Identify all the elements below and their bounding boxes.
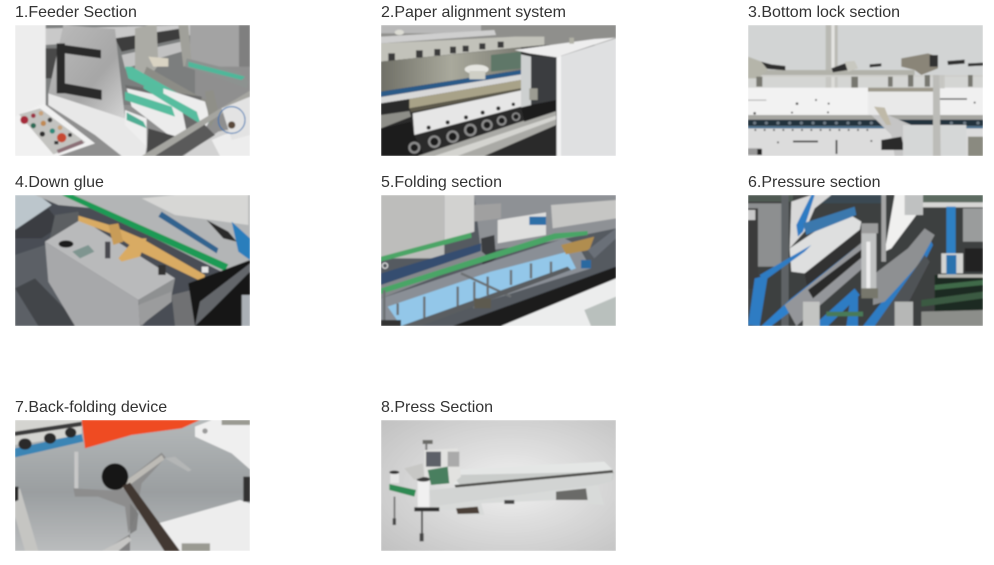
heading: Press Section: 8.Press Section: [381, 399, 493, 416]
panel: 1 Feeder Section: [15, 4, 250, 156]
photo: press section machine: [381, 420, 616, 551]
photo: feeder section: [15, 25, 250, 156]
heading: Back-folding device: 7.Back-folding device: [15, 399, 167, 416]
photo: pressure section: [748, 195, 983, 326]
heading: Paper alignment system: 2.Paper alignment system: [381, 4, 566, 21]
panel: 3 Bottom lock section: [748, 4, 983, 156]
heading: Bottom lock section: 3.Bottom lock section: [748, 4, 900, 21]
photo: paper alignment: [381, 25, 616, 156]
photo: back-folding device: [15, 420, 250, 551]
heading: Folding section: 5.Folding section: [381, 174, 502, 191]
photo: down glue: [15, 195, 250, 326]
photo: folding section: [381, 195, 616, 326]
panel: 7 Back-folding device: [15, 399, 250, 551]
panel: 5 Folding section: [381, 174, 616, 326]
photo: bottom lock: [748, 25, 983, 156]
panel: 2 Paper alignment system: [381, 4, 616, 156]
panel: 4 Down glue: [15, 174, 250, 326]
panel: 8 Press Section: [381, 399, 616, 551]
panel: 6 Pressure section: [748, 174, 983, 326]
heading: Feeder Section: 1.Feeder Section: [15, 4, 137, 21]
heading: Down glue: 4.Down glue: [15, 174, 104, 191]
heading: Pressure section: 6.Pressure section: [748, 174, 881, 191]
